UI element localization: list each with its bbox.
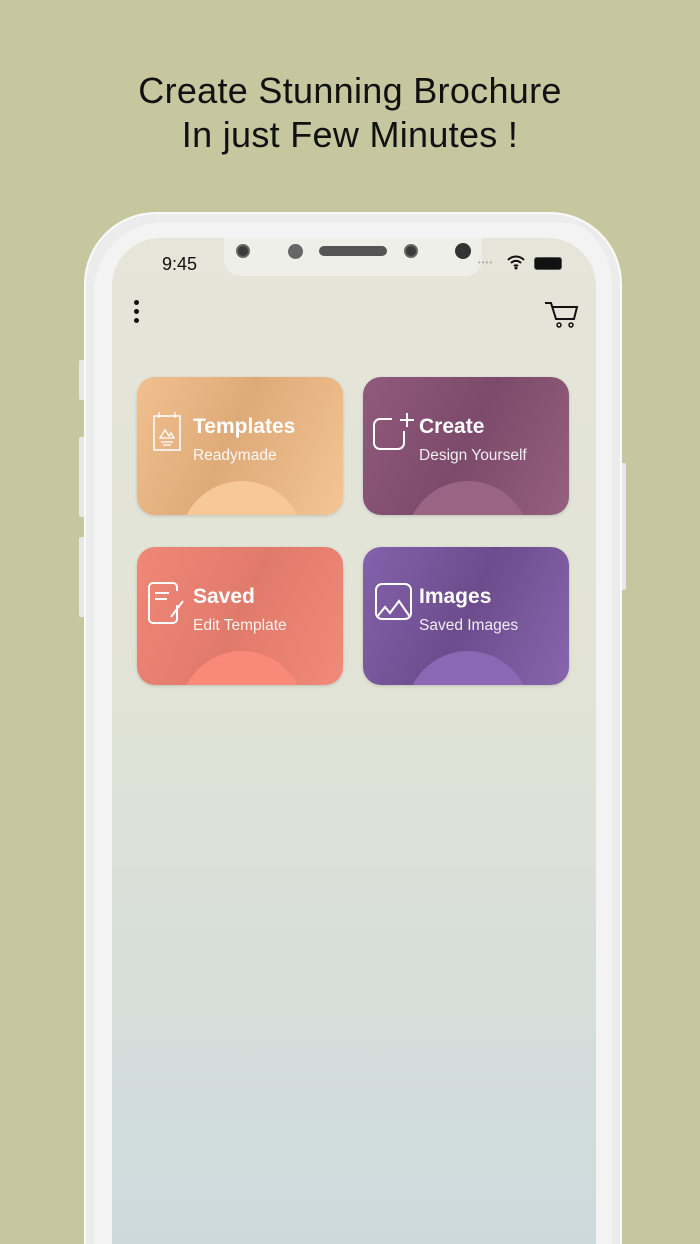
card: Create: Design Yourself (419, 447, 527, 464)
menu icon (134, 300, 139, 323)
card: Templates: Readymade (193, 447, 277, 464)
phone frame (84, 212, 622, 1244)
camera dots (236, 244, 250, 258)
icon: image (375, 583, 412, 620)
card: Templates: Templates (193, 415, 295, 438)
status time: 9:45 (162, 254, 197, 274)
icon: edit (148, 582, 184, 624)
title (138, 70, 562, 155)
card: Images: Saved Images (419, 617, 518, 634)
card: Images: Images (419, 585, 491, 608)
cart icon (545, 302, 578, 328)
notch (224, 236, 482, 276)
icon: calendar (153, 412, 181, 451)
screen (112, 238, 596, 1244)
card: Saved: Edit Template (193, 617, 287, 634)
card: Create: Create (419, 415, 484, 438)
card: Templates (137, 377, 343, 515)
title: In just Few Minutes ! (182, 114, 518, 155)
status icons: •••• (478, 258, 493, 267)
card: Saved: Saved (193, 585, 255, 608)
card: Saved (137, 547, 343, 685)
card: Images (363, 547, 569, 685)
title: Create Stunning Brochure (138, 70, 562, 111)
side buttons (79, 360, 85, 400)
icon: add (373, 413, 414, 450)
card: Create (363, 377, 569, 515)
